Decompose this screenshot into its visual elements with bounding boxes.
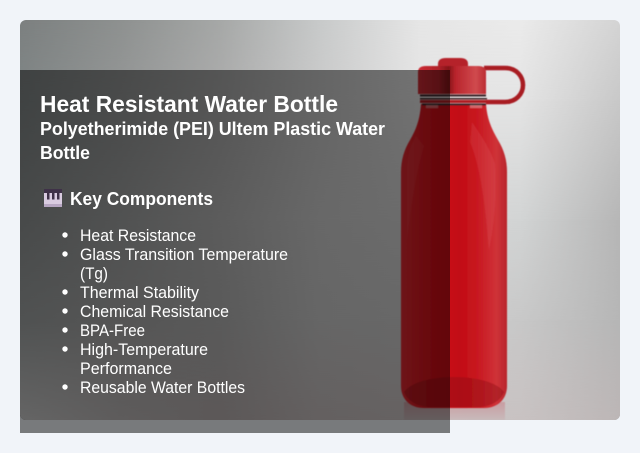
bulleted list: BPA-Free: [80, 321, 145, 340]
translucent text overlay: [20, 70, 450, 433]
subtitle: Polyetherimide (PEI) Ultem Plastic Water: [40, 118, 385, 139]
bottle reflection: [404, 402, 505, 420]
bulleted list: Glass Transition Temperature: [80, 245, 288, 264]
title: Heat Resistant Water Bottle: [40, 91, 338, 117]
bulleted list: Thermal Stability: [80, 283, 200, 302]
bottle cap nub: [438, 58, 468, 66]
bulleted list: Heat Resistance: [80, 226, 196, 245]
heading: key components: Key Components: [70, 188, 213, 209]
bottle neck rings: [420, 94, 487, 106]
bulleted list: Reusable Water Bottles: [80, 378, 245, 397]
bulleted list: Chemical Resistance: [80, 302, 229, 321]
icon: musical keyboard: [44, 189, 62, 207]
bottle handle: [484, 68, 523, 102]
bulleted list: High-Temperature: [80, 340, 208, 359]
bottle cap: [418, 66, 486, 94]
bulleted list: (Tg): [80, 264, 108, 283]
bulleted list: Performance: [80, 359, 172, 378]
bulleted list: [62, 226, 288, 397]
subtitle: Bottle: [40, 142, 90, 163]
subtitle: [40, 118, 385, 163]
bottle highlights: [470, 122, 496, 250]
bottle body: [401, 104, 507, 408]
